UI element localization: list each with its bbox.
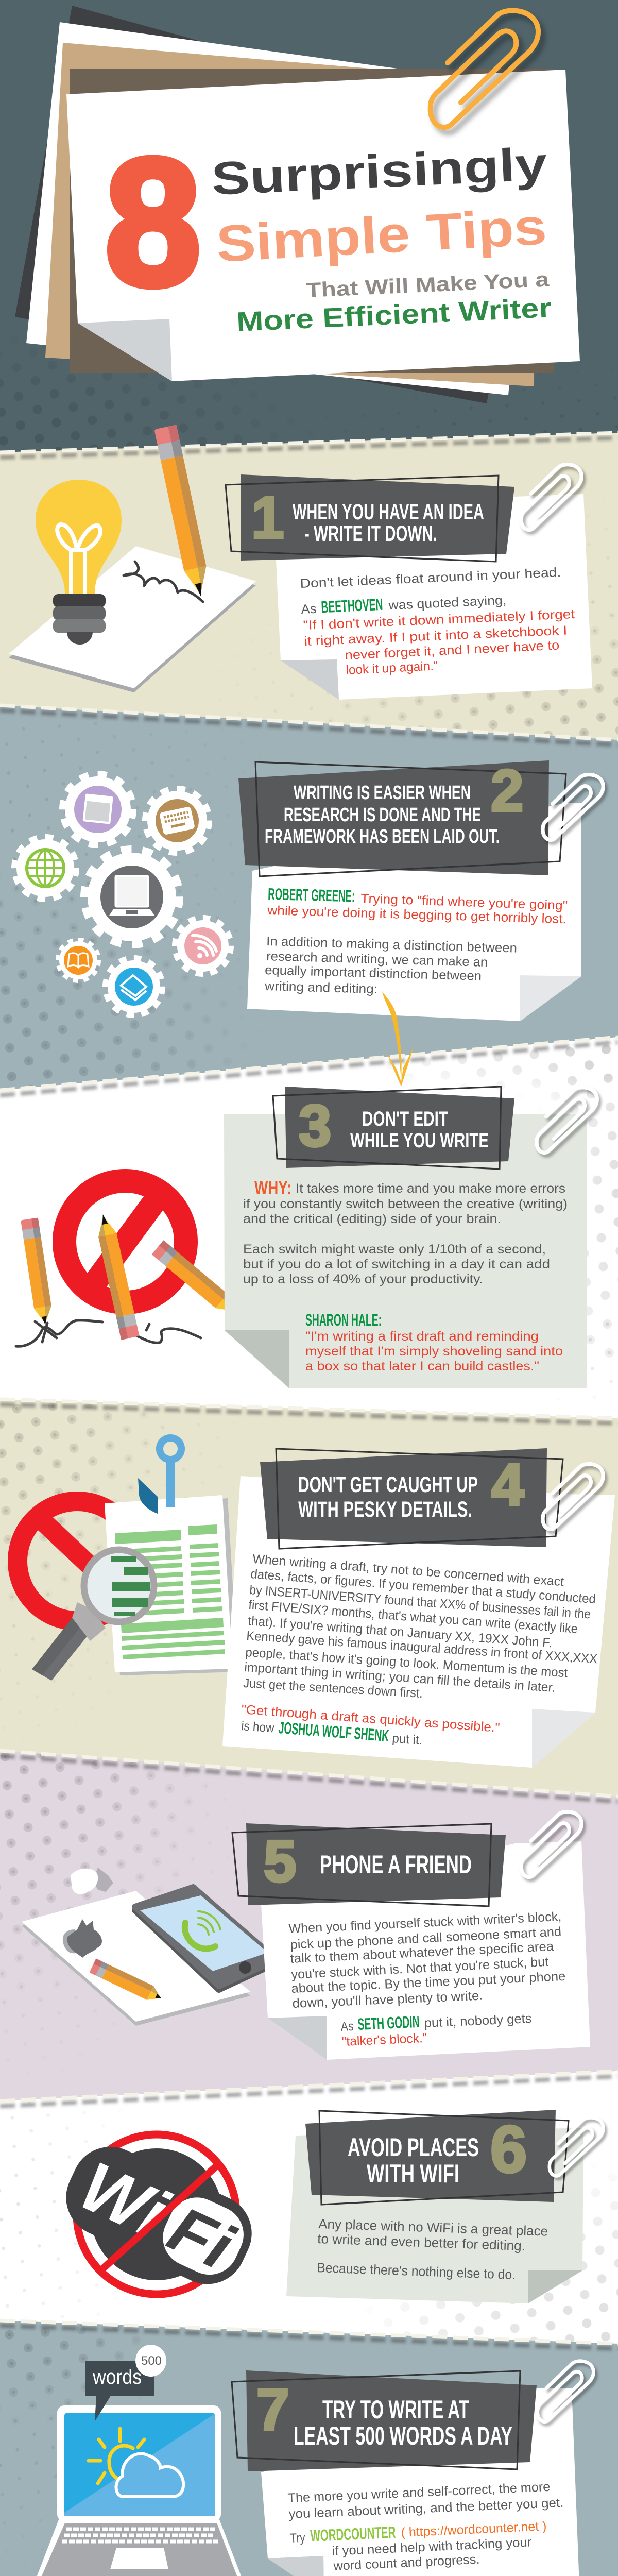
body text: [287, 2480, 564, 2521]
body text: to write and even better for editing.: [317, 2231, 526, 2253]
body text continued: [332, 2535, 532, 2573]
quote: [267, 891, 568, 926]
pencil: [90, 1958, 165, 2005]
why label: WHY:: [254, 1177, 291, 1198]
tip 1: note paper: [276, 494, 592, 700]
heading: [348, 2133, 479, 2188]
attribution: put it.: [392, 1731, 423, 1748]
tip 4: paperclip: [543, 1464, 603, 1529]
title: That Will Make You a: That Will Make You a: [305, 268, 550, 302]
tip 2: heading banner: [238, 758, 566, 876]
tip 5: note paper: [261, 1841, 590, 2060]
number 7: 7: [256, 2377, 289, 2443]
body text: When you find yourself stuck with writer's block,: [288, 1909, 562, 1936]
gear: layers: [106, 959, 162, 1014]
quote: "I'm writing a first draft and reminding: [305, 1329, 539, 1344]
magnifying glass: [32, 1550, 154, 1681]
Beethoven line: As: [301, 602, 317, 617]
Seth Godin line: [340, 2011, 532, 2034]
tip 6: paperclip: [550, 2117, 604, 2176]
body text: The more you write and self-correct, the more: [287, 2480, 551, 2505]
tip 4: heading banner: [260, 1448, 563, 1549]
laptop base: [34, 2518, 244, 2576]
wifi logo: Fi: [158, 2193, 245, 2284]
tip 2: paperclip: [543, 774, 603, 840]
tip 3: note panel: [224, 1114, 587, 1388]
Seth Godin line: put it, nobody gets: [424, 2011, 532, 2030]
red slash: [102, 2164, 219, 2269]
heading: LEAST 500 WORDS A DAY: [294, 2421, 512, 2450]
title: Surprisingly: Surprisingly: [210, 139, 548, 205]
heading: WHILE YOU WRITE: [350, 1129, 489, 1152]
body text: you learn about writing, and the better you get.: [288, 2496, 564, 2521]
attribution: is how: [241, 1719, 275, 1736]
pencil right: [151, 1240, 241, 1319]
paper balls: [71, 1868, 113, 1894]
body text: [264, 934, 517, 996]
gear: wifi: [176, 919, 230, 973]
body text: Because there's nothing else to do.: [317, 2260, 516, 2282]
quote: [303, 607, 575, 677]
tip 1: heading banner: - WRITE IT DOWN.: [304, 521, 437, 546]
body text: [243, 1552, 598, 1701]
body text: When writing a draft, try not to be concerned with exact: [252, 1552, 564, 1589]
gear: window: [64, 775, 132, 843]
background: tip 4 section: [0, 1399, 618, 1797]
body text: important thing in writing; you can fill the details in later.: [244, 1660, 556, 1695]
header: orange paperclip: [431, 11, 538, 127]
heading: WITH WIFI: [367, 2159, 459, 2188]
number 3: 3: [299, 1093, 331, 1159]
heading: WITH PESKY DETAILS.: [298, 1497, 472, 1522]
tip 3: heading banner: [273, 1087, 514, 1169]
body text: [243, 1181, 568, 1286]
Beethoven line: BEETHOVEN: [321, 595, 383, 616]
number 6: 6: [490, 2113, 527, 2187]
Beethoven line: was quoted saying,: [388, 593, 507, 613]
wifi logo: Wi: [69, 2147, 180, 2253]
heading: WHEN YOU HAVE AN IDEA: [293, 500, 484, 524]
body text: It takes more time and you make more errors: [296, 1181, 565, 1196]
body text: [288, 1909, 566, 2011]
heading: PHONE A FRIEND: [320, 1850, 472, 1879]
body text: first FIVE/SIX? months, that's what you can write (exactly like: [248, 1598, 578, 1636]
pencil center: [94, 1212, 140, 1340]
quote: a box so that later I can build castles.": [305, 1359, 539, 1374]
Seth Godin line: As: [340, 2019, 354, 2034]
scribble: [124, 562, 203, 602]
heading: WRITING IS EASIER WHEN: [294, 782, 471, 804]
number 2: 2: [491, 758, 523, 824]
tip 6: note panel: [286, 2128, 583, 2303]
heading: [265, 782, 500, 848]
sun: [89, 2429, 144, 2483]
background: tip 6 section: [0, 2071, 618, 2344]
tip 7: paperclip: [538, 2361, 593, 2421]
laptop screen: [57, 2405, 221, 2521]
wifi logo: [45, 2115, 273, 2315]
body text: up to a loss of 40% of your productivity.: [243, 1272, 483, 1286]
Beethoven line: [301, 589, 507, 617]
paper: [22, 1891, 250, 2026]
body text: Kennedy gave his famous inaugural address in front of XXX,XXX: [246, 1629, 598, 1666]
wordcounter line: ( https://wordcounter.net ): [401, 2519, 547, 2540]
number 5: 5: [264, 1829, 296, 1894]
quote: while you're doing it is begging to get horribly lost.: [267, 903, 566, 926]
tip 3: no-editing illustration: [16, 1181, 325, 1346]
phone: [135, 1887, 277, 1990]
tip 6: no wifi illustration: [45, 2115, 273, 2315]
quote: "If I don't write it down immediately I forget: [303, 607, 575, 633]
body text: you're stuck with is. Not that you're stuck, but: [291, 1955, 549, 1982]
quote: it right away. If I put it into a sketchbook I: [304, 623, 568, 649]
heading: [294, 2395, 512, 2450]
body text: research and writing, we can make an: [266, 949, 488, 970]
body text continued: word count and progress.: [333, 2552, 480, 2573]
gear: book: [58, 940, 98, 980]
quote: never forget it, and I never have to: [345, 638, 560, 663]
speech bubble: words: [92, 2366, 142, 2388]
prohibition sign: [18, 1501, 137, 1621]
body text: dates, facts, or figures. If you remember that a study conducted: [250, 1567, 596, 1606]
body text: Each switch might waste only 1/10th of a second,: [243, 1242, 546, 1257]
gear: globe: [15, 838, 75, 898]
Robert Greene label: ROBERT GREENE:: [268, 885, 355, 905]
cloud: [116, 2453, 183, 2497]
body text: In addition to making a distinction between: [266, 934, 517, 956]
background: tip 3 section: [15, 1037, 618, 1383]
heading: DON'T GET CAUGHT UP: [298, 1472, 478, 1497]
tip 5: paperclip: [521, 1811, 581, 1877]
call icon: [185, 1911, 220, 1948]
heading: FRAMEWORK HAS BEEN LAID OUT.: [265, 826, 500, 848]
number 4: 4: [491, 1452, 524, 1518]
tip 1: paperclip: [521, 464, 581, 530]
body text: about the topic. By the time you put your phone: [291, 1969, 566, 1996]
body text: equally important distinction between: [265, 963, 482, 984]
tip 7: laptop illustration: [34, 2345, 244, 2576]
attribution: [241, 1718, 423, 1748]
tip 7: note paper: [261, 2388, 579, 2576]
pencil left: [21, 1217, 54, 1326]
body text: and the critical (editing) side of your brain.: [243, 1212, 501, 1226]
heading: DON'T EDIT: [362, 1108, 448, 1130]
attribution: JOSHUA WOLF SHENK: [278, 1718, 390, 1745]
background: header section: [0, 0, 618, 464]
tip 4: note paper: [222, 1476, 615, 1768]
background: tip 7 section: [0, 2320, 618, 2576]
body text: Just get the sentences down first.: [243, 1676, 423, 1701]
header: title card: [66, 70, 580, 381]
speech bubble: [85, 2345, 166, 2421]
ink blot: [63, 1919, 102, 1958]
body text: Don't let ideas float around in your head.: [300, 565, 561, 591]
gear: keyboard: [146, 790, 208, 852]
tip 3: paperclip: [537, 1087, 597, 1153]
background: tip 2 section: [0, 705, 618, 1092]
gear: laptop: [86, 851, 178, 943]
heading: AVOID PLACES: [348, 2133, 479, 2162]
title: More Efficient Writer: More Efficient Writer: [236, 293, 552, 337]
quote: [305, 1329, 563, 1374]
quote: look it up again.": [346, 658, 438, 677]
tip 7: heading banner: [232, 2370, 537, 2471]
body text: if you constantly switch between the creative (writing): [243, 1197, 568, 1211]
tip 2: note paper: [247, 803, 581, 1021]
tip 1: heading banner: [226, 474, 514, 562]
tip 6: heading banner: [305, 2110, 569, 2205]
tip 2: gears illustration: [15, 775, 230, 1014]
body text: down, you'll have plenty to write.: [292, 1989, 483, 2011]
binder clip: [138, 1438, 181, 1514]
tip 5: phone illustration: [22, 1868, 277, 2026]
icon: light bulb: [36, 480, 122, 645]
paper: [9, 546, 256, 692]
background: tip 1 section: [0, 433, 618, 742]
wordcounter line: [290, 2519, 547, 2546]
body text: by INSERT-UNIVERSITY found that XX% of businesses fail in the: [249, 1583, 591, 1621]
scribbles: [16, 1297, 325, 1346]
title: Simple Tips: Simple Tips: [215, 197, 548, 273]
number 1: 1: [251, 485, 284, 551]
Sharon Hale label: SHARON HALE:: [305, 1311, 382, 1329]
speech bubble: 500: [141, 2354, 162, 2368]
body text: [317, 2216, 548, 2282]
tip 5: heading banner: [232, 1823, 506, 1906]
body text: people, that's how it's going to look. Momentum is the most: [245, 1645, 568, 1680]
quote: myself that I'm simply shoveling sand into: [305, 1344, 563, 1359]
heading: [350, 1108, 489, 1152]
tip 1: illustration: [9, 425, 256, 692]
quote: "Get through a draft as quickly as possible.": [241, 1702, 500, 1735]
quote: Trying to "find where you're going": [360, 891, 568, 913]
wordcounter line: WORDCOUNTER: [310, 2523, 396, 2545]
tip 4: details illustration: [18, 1438, 238, 1681]
body text: writing and editing:: [264, 979, 378, 996]
wordcounter line: Try: [290, 2531, 306, 2546]
body text: talk to them about whatever the specific area: [290, 1939, 554, 1966]
body text: that). If you're writing that on January XX, 19XX John F.: [248, 1614, 553, 1650]
heading: TRY TO WRITE AT: [322, 2395, 469, 2424]
heading: RESEARCH IS DONE AND THE: [284, 804, 481, 826]
quote: "talker's block.": [341, 2031, 427, 2049]
heading: [298, 1472, 478, 1522]
Seth Godin line: SETH GODIN: [357, 2012, 420, 2033]
icon: pencil: [154, 425, 212, 599]
arrow: yellow curved: [382, 991, 414, 1087]
prohibition sign: [64, 1181, 186, 1302]
body text: pick up the phone and call someone smart and: [290, 1924, 562, 1952]
header: stacked papers: [15, 6, 554, 403]
body text: but if you do a lot of switching in a day it can add: [243, 1257, 550, 1272]
body text: Any place with no WiFi is a great place: [318, 2216, 548, 2239]
title number 8: 8: [105, 122, 201, 323]
background: tip 5 section: [0, 1751, 618, 2102]
document: [105, 1495, 238, 1675]
body text continued: if you need help with tracking your: [332, 2535, 532, 2558]
